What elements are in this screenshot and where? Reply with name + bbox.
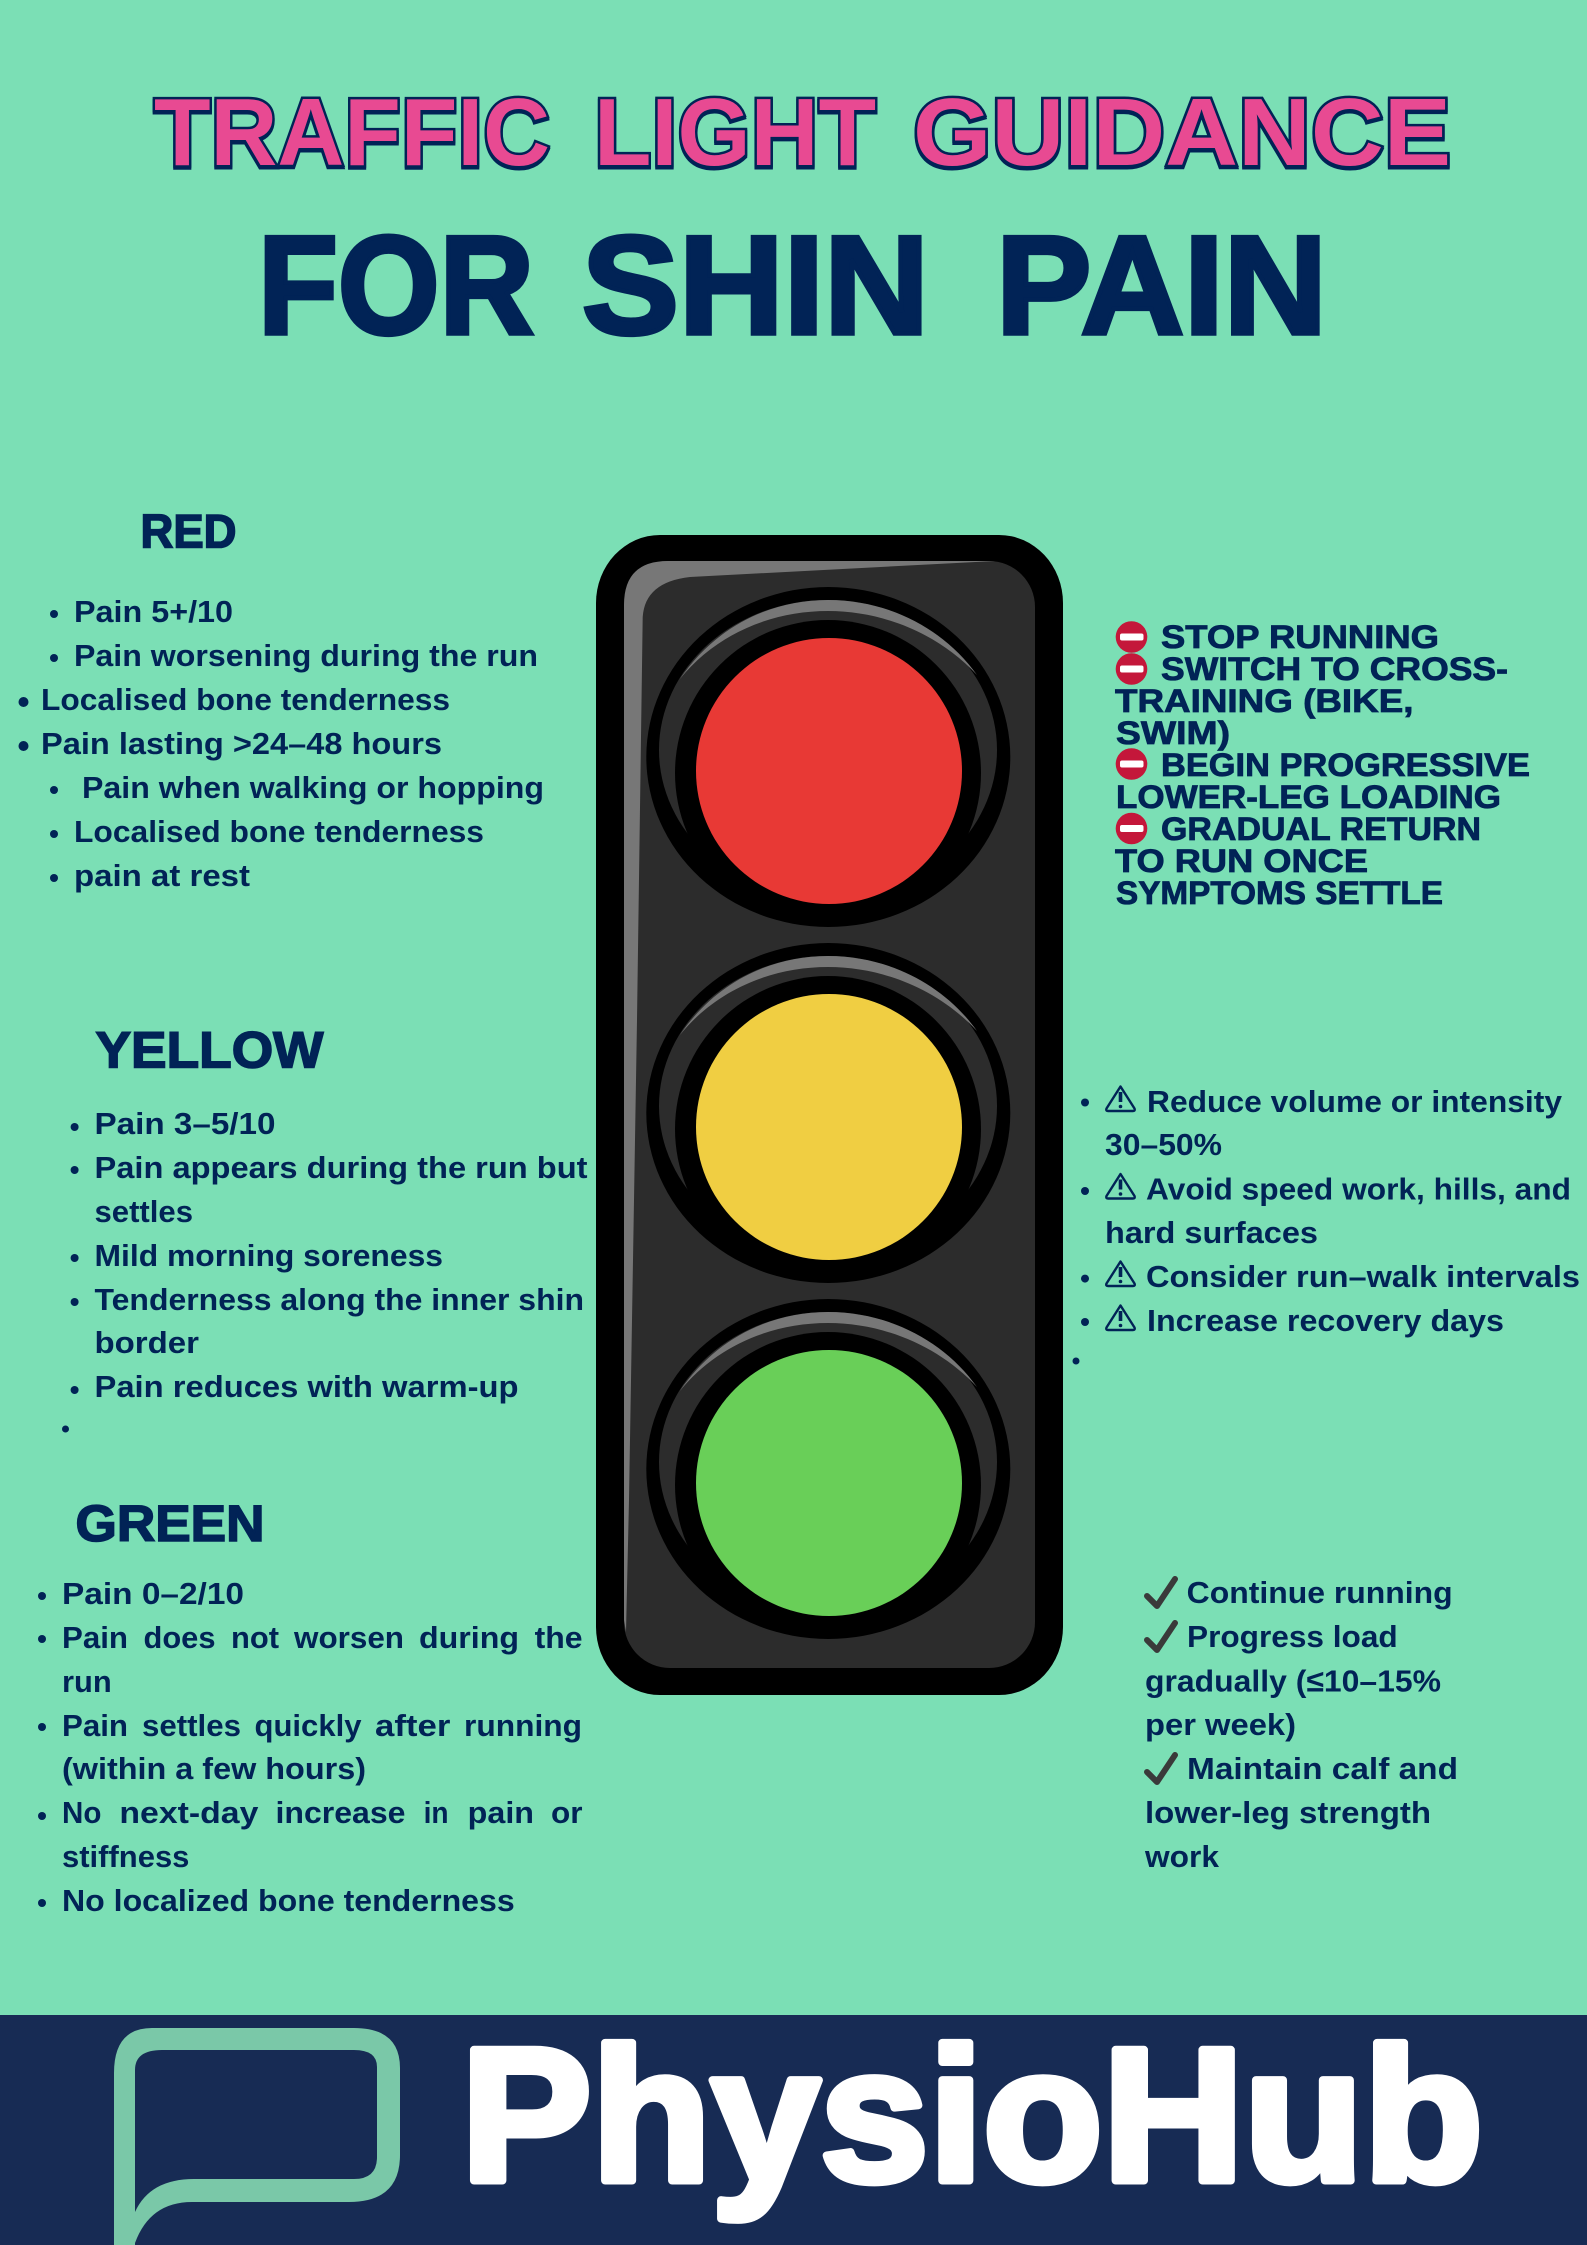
green symptom list: quickly — [254, 1708, 362, 1743]
red symptom list: Localised bone tenderness — [74, 814, 484, 849]
heading: yellow: YELLOW — [96, 1022, 324, 1078]
green symptom list: run — [62, 1664, 112, 1699]
action: gradual return — [1115, 811, 1481, 911]
green symptom list: stiffness — [62, 1839, 189, 1874]
subtitle: for shin pain: SHIN — [582, 206, 929, 364]
action: stop running: STOP RUNNING — [1161, 619, 1439, 655]
action: gradual return: TO RUN ONCE — [1115, 843, 1368, 879]
action: progress load: Progress load — [1187, 1619, 1398, 1654]
icon: no entry — [1116, 653, 1147, 685]
yellow symptom list: Pain 3–5/10 — [94, 1106, 276, 1141]
yellow symptom list: Mild morning soreness — [94, 1238, 443, 1273]
green symptom list — [38, 1576, 583, 1918]
panel: green symptoms — [38, 1495, 583, 1918]
action: calf strength: Maintain calf and — [1187, 1751, 1458, 1786]
icon: no entry — [1116, 621, 1147, 653]
heading: green: GREEN — [76, 1495, 264, 1552]
icon: speech bubble logo — [114, 2028, 400, 2245]
action: progressive loading — [1116, 747, 1530, 815]
red symptom list: Pain lasting >24–48 hours — [41, 726, 442, 761]
panel: red symptoms — [18, 504, 544, 893]
footer banner — [0, 2010, 1587, 2245]
subtitle: for shin pain — [258, 206, 1327, 364]
title: traffic light guidance — [154, 79, 1451, 186]
green symptom list: next-day — [119, 1795, 259, 1830]
green symptom list: No — [62, 1795, 101, 1830]
red symptom list: Pain 5+/10 — [74, 594, 233, 629]
green symptom list: not — [231, 1620, 279, 1655]
green symptom list: Pain — [62, 1620, 128, 1655]
green symptom list: worsen — [293, 1620, 404, 1655]
action: avoid speed work — [1081, 1172, 1571, 1250]
green symptom list: Pain 0–2/10 — [62, 1576, 244, 1611]
yellow light — [646, 943, 1010, 1283]
green symptom list: the — [535, 1620, 583, 1655]
action: progress load — [1145, 1619, 1441, 1742]
panel: yellow symptoms — [62, 1022, 588, 1432]
red symptom list: pain at rest — [74, 858, 250, 893]
green symptom list: during — [419, 1620, 519, 1655]
action: switch to cross-training: SWIM) — [1116, 715, 1230, 751]
action: avoid speed work: hard surfaces — [1105, 1216, 1318, 1250]
panel: green actions — [1144, 1575, 1458, 1874]
action: progress load: gradually (≤10–15% — [1145, 1664, 1441, 1698]
green symptom list: or — [551, 1795, 582, 1830]
green symptom list: running — [464, 1708, 582, 1743]
icon: no entry — [1116, 748, 1147, 780]
yellow symptom list: Pain appears during the run but — [94, 1150, 588, 1185]
action: calf strength: work — [1144, 1839, 1220, 1874]
housing — [596, 535, 1063, 1695]
green symptom list: settles — [142, 1708, 241, 1743]
action: switch to cross-training — [1115, 651, 1508, 751]
title: traffic light guidance: LIGHT — [594, 79, 876, 186]
heading: red: RED — [140, 504, 236, 558]
panel: red actions — [1115, 619, 1530, 911]
green symptom list: (within a few hours) — [62, 1751, 366, 1786]
red symptom list: Pain worsening during the run — [74, 638, 538, 673]
action: continue running: Continue running — [1187, 1575, 1453, 1610]
action: calf strength: lower-leg strength — [1145, 1795, 1431, 1830]
logo wordmark: PhysioHub — [461, 2010, 1483, 2222]
action: gradual return: SYMPTOMS SETTLE — [1116, 875, 1443, 911]
action: gradual return: GRADUAL RETURN — [1161, 811, 1481, 847]
action: run-walk intervals: Consider run–walk intervals — [1146, 1260, 1580, 1294]
green symptom list: in — [424, 1795, 449, 1830]
green symptom list: Pain — [62, 1708, 128, 1743]
traffic light — [596, 535, 1063, 1695]
green symptom list: pain — [468, 1795, 534, 1830]
green symptom list: does — [144, 1620, 216, 1655]
red symptom list — [18, 594, 544, 893]
action: reduce volume: 30–50% — [1105, 1128, 1222, 1162]
action: switch to cross-training: SWITCH TO CROSS- — [1161, 651, 1508, 687]
yellow symptom list: border — [94, 1325, 199, 1360]
action: recovery days — [1072, 1304, 1504, 1364]
title: traffic light guidance: GUIDANCE — [913, 79, 1451, 186]
subtitle: for shin pain: FOR — [258, 206, 534, 364]
yellow symptom list: Tenderness along the inner shin — [94, 1282, 584, 1317]
action: calf strength — [1144, 1751, 1458, 1874]
red symptom list: Pain when walking or hopping — [82, 770, 544, 805]
title: traffic light guidance: TRAFFIC — [154, 79, 550, 186]
action: avoid speed work: Avoid speed work, hills, and — [1146, 1172, 1571, 1206]
green symptom list: increase — [276, 1795, 406, 1830]
action: reduce volume: Reduce volume or intensity — [1147, 1085, 1562, 1119]
panel: yellow actions — [1072, 1085, 1580, 1364]
yellow symptom list — [62, 1106, 588, 1432]
action: reduce volume — [1081, 1085, 1562, 1162]
action: switch to cross-training: TRAINING (BIKE, — [1115, 683, 1414, 719]
action: progressive loading: BEGIN PROGRESSIVE — [1161, 747, 1530, 783]
action: recovery days: Increase recovery days — [1147, 1304, 1504, 1338]
action: progressive loading: LOWER-LEG LOADING — [1116, 779, 1501, 815]
red light — [646, 587, 1010, 927]
green symptom list: No localized bone tenderness — [62, 1883, 515, 1918]
yellow symptom list: settles — [94, 1194, 193, 1229]
action: progress load: per week) — [1145, 1707, 1296, 1742]
green symptom list: after — [375, 1708, 450, 1743]
subtitle: for shin pain: PAIN — [996, 206, 1327, 364]
red symptom list: Localised bone tenderness — [41, 682, 450, 717]
green light — [646, 1299, 1010, 1639]
yellow symptom list: Pain reduces with warm-up — [94, 1369, 518, 1404]
icon: no entry — [1116, 813, 1147, 844]
